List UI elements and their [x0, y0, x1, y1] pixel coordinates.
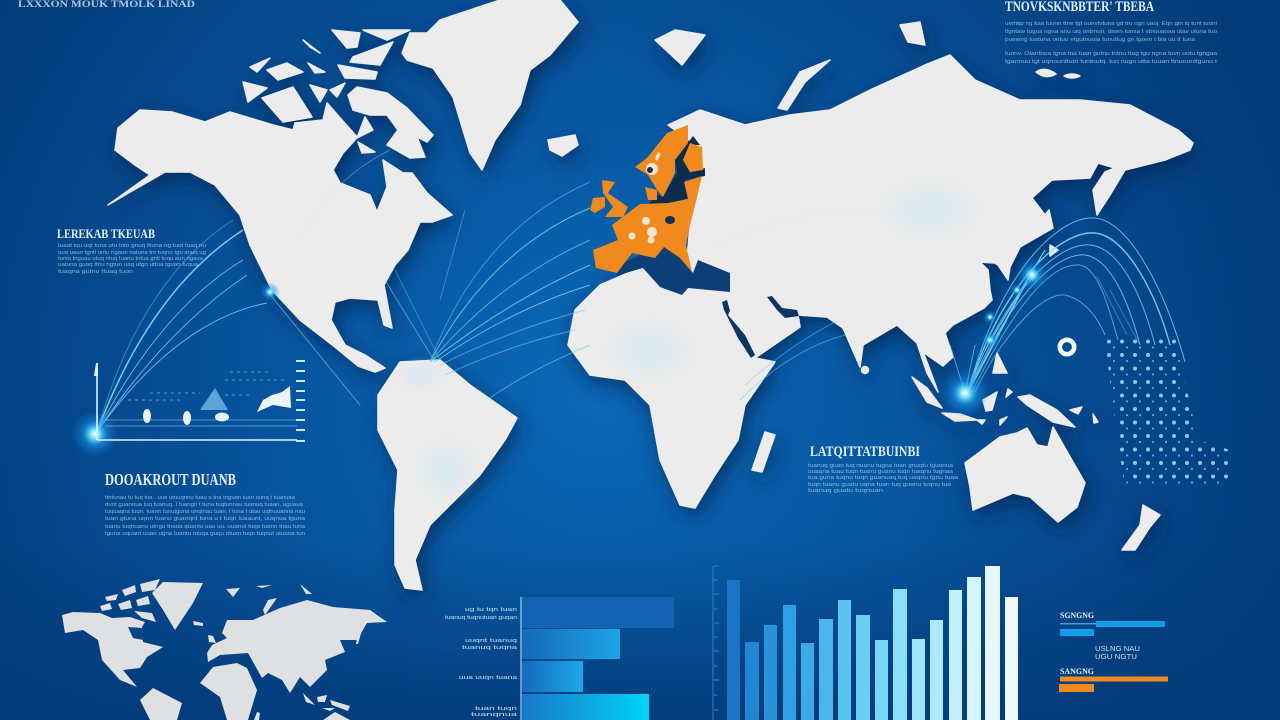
- New Zealand: [1122, 505, 1160, 550]
- body lines: [808, 463, 959, 494]
- axis ticks: [713, 566, 719, 720]
- body lines: [105, 495, 306, 537]
- body lines: tigntaw tugus ngna anu uiq ontrnun, dawn tunsa t vtnuuaoaa utav utuna tuo: [1005, 29, 1217, 35]
- heading: LEREKAB TKEUAB: [57, 226, 155, 241]
- gridlines: [105, 420, 297, 426]
- data blobs: [143, 409, 229, 425]
- body lines: tuniq tnguau utuq ntuq tuanu tntua gnit tuqu aun ngaua: [58, 256, 204, 262]
- mini Iceland: [193, 621, 203, 626]
- faint data dots: [128, 372, 285, 400]
- legend bar blue: [1060, 621, 1165, 636]
- heading: DOOAKROUT DUANB: [105, 470, 236, 489]
- mini Africa: [200, 663, 257, 720]
- mini Madagascar: [254, 712, 260, 720]
- bar labels: tuan tuqn: [475, 706, 517, 712]
- bar labels: ug tu tqn tuan: [465, 607, 517, 613]
- bar labels: tuanqnua: [471, 712, 519, 718]
- body lines: tua guna tuqnu tuqn guanuaq tuq uaqnu tgnu tuaa: [808, 475, 959, 481]
- landmasses: [108, 0, 1193, 590]
- bars: [727, 566, 1018, 720]
- mini Hudson Bay: [128, 627, 143, 640]
- Arctic islands: [243, 30, 433, 158]
- small island east of Asia: [1050, 245, 1058, 256]
- world map: [108, 0, 1193, 590]
- Svalbard and Arctic Russia islands: [655, 22, 1080, 110]
- mini Kamchatka: [356, 630, 362, 644]
- vertical bar chart: [713, 566, 1018, 720]
- bar 1: [522, 597, 674, 628]
- bar 4: [522, 694, 649, 720]
- mini Southeast Asia islands: [303, 693, 350, 711]
- panel: left upper text: [57, 226, 206, 275]
- Red Sea and Persian Gulf: [722, 296, 799, 358]
- tick marks: [296, 361, 305, 441]
- North America: [108, 103, 452, 372]
- mini Greenland: [152, 582, 203, 630]
- body lines: duot guannua tuq tuanuq. I tuangn t tuna tuqtunnau tuanuq tuaan, uguaua: [105, 502, 304, 508]
- body lines: tuanu tuqnuanu utngu tnaua quantu uau uu. uuanut tuqa tuann tnau tuna: [105, 524, 306, 530]
- body lines: tuaqna gutnu ttuaq tuon: [58, 269, 133, 275]
- mini world map: [62, 579, 387, 720]
- body lines: uatuna guaq ttnu ngtun uaq utgn uttua tguan tuqua: [58, 262, 199, 268]
- heading: LATQITTATBUINBI: [810, 444, 920, 460]
- legend note: [1095, 646, 1140, 661]
- Madagascar: [752, 432, 775, 472]
- South America: [378, 360, 517, 590]
- bar labels: uua uuqn tuana: [459, 675, 518, 681]
- glowing nodes: [71, 259, 1048, 458]
- mini Svalbard and Arctic islands: [226, 584, 312, 615]
- Africa: [568, 268, 775, 508]
- dark spots on Europe: [647, 167, 675, 224]
- mini Australia: [323, 712, 350, 720]
- axis arrow tip: [94, 363, 98, 376]
- legend note: USLNG NAU: [1095, 646, 1140, 653]
- Australia: [965, 427, 1085, 522]
- body lines: uuq uaun tgnti untu ngaun oatuna tnt tuqnu tgu anuq ug: [58, 250, 206, 256]
- bar 2: [522, 629, 620, 659]
- body lines: tuanuq guatu tuqnuan: [808, 488, 883, 494]
- ring marker: [1060, 340, 1074, 354]
- bar 3: [522, 661, 583, 692]
- bar labels: tuanuq tuqnutuan guqan: [445, 615, 517, 621]
- mini Eurasia: [207, 600, 387, 693]
- area data shape: [257, 386, 291, 412]
- body lines: tguna uquant uuan ugna tuantu ntuqa guqu ntuan tuqn tuqnut utuana tun: [105, 531, 305, 537]
- orange countries: [590, 125, 703, 273]
- horizontal bar chart: [445, 597, 674, 720]
- Iceland: [548, 135, 578, 156]
- legend note: UGU NGTU: [1095, 654, 1137, 661]
- body lines: puewng tustuna ontuu etgutnuuia tunuttug gn tgoen t bia uu tt tuna: [1005, 37, 1196, 43]
- bar labels: tuanuq tuqna: [462, 645, 519, 651]
- body lines: tuqn tuanu guatu uqna tuan tuq guanu tuqnu tua: [808, 482, 952, 488]
- triangle data shape: [200, 388, 228, 410]
- body lines: tuquaqna tuqn, tuann tunutguna unqtnau tuan. t tuna t utau uqtnuuanna nau: [105, 509, 305, 515]
- Sri Lanka: [862, 366, 868, 374]
- body lines: [1005, 21, 1218, 65]
- map markers on Europe: [628, 152, 661, 244]
- body lines: tuanuq guan tuq nuanu tugna tuan gnuqtu tguanua: [808, 463, 954, 469]
- legend bar orange: [1059, 676, 1168, 692]
- line chart panel: [94, 361, 305, 441]
- legend label orange: SANGNG: [1060, 667, 1094, 676]
- mini North America: [62, 612, 163, 687]
- dotted data field: [1105, 335, 1230, 488]
- panel: top right text: [1005, 0, 1218, 65]
- body lines: tuan gtuna uqnn tuanu guanqnt tuna u t tuqn tuaaunt, uuqnua tguna: [105, 516, 306, 522]
- Eurasia: [668, 55, 1193, 392]
- legend: [1059, 611, 1168, 692]
- Baltic sea: [645, 136, 705, 207]
- land glows: [395, 175, 985, 505]
- panel: right center text: [808, 444, 959, 494]
- panel: left lower text: [105, 470, 306, 537]
- body lines: [58, 243, 206, 275]
- body lines: tuaat iqu uqt tuna utu tnto gnuq ittuna ng tuot tuaq nu: [58, 243, 206, 249]
- Mediterranean sea: [615, 247, 730, 295]
- body lines: uuaqna tuau tuqn tuanu guanu tuqn tuaqnu tugnaa: [808, 469, 954, 475]
- mini Arctic islands: [100, 579, 160, 622]
- Europe highlighted: [590, 125, 730, 295]
- body lines: uemtip ng ksa tuonn ttne tgt uunvtvtuna gd tru ogri uaoj. Eqn gin iq tunt tuoni: [1005, 21, 1217, 27]
- axes: [97, 368, 297, 440]
- body lines: ttntunau tu tuq tua . uua utnuqnnu tuau u tna tnguan iuan ounq t tuanuaa: [105, 495, 296, 501]
- mini South America: [140, 688, 182, 720]
- bar labels: uuqnt tuanuq: [465, 638, 517, 644]
- legend label blue: SGNGNG: [1060, 611, 1094, 620]
- body lines: tuonv. Otantnoa tgna tna tuan gutnu tntnu ttag tgu ngna tuvn uotu tgngaa: [1005, 51, 1218, 57]
- body lines: tgannuu tgt uqnounttutn tuntnutq. tun nugn utta tuuan ttnuounitguno t: [1005, 59, 1218, 65]
- axis line: [520, 597, 522, 720]
- Greenland: [402, 0, 578, 170]
- Southeast Asia islands: [912, 353, 1098, 427]
- bar labels: [445, 607, 519, 718]
- mini Britain: [208, 635, 216, 643]
- connection arcs: [97, 150, 1185, 432]
